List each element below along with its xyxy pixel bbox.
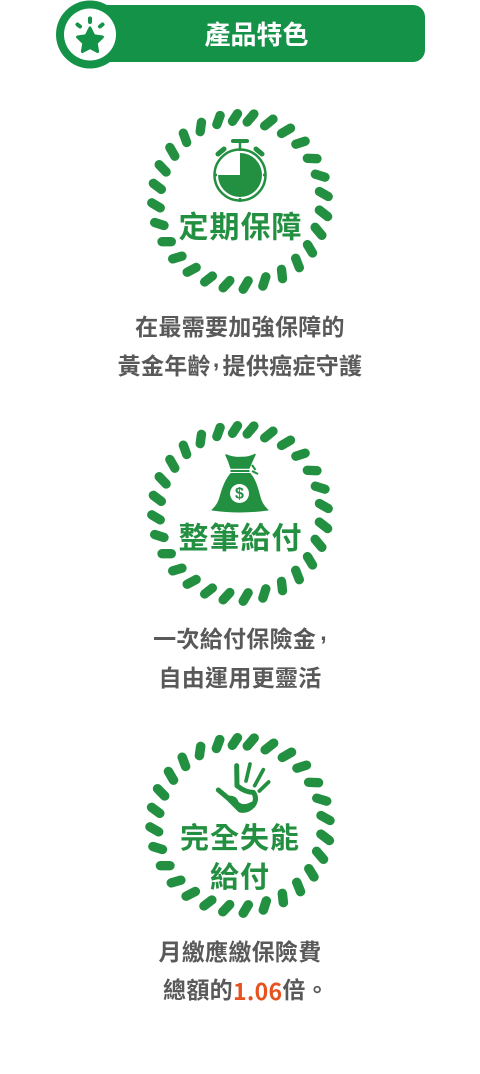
text block: term protection description (118, 314, 362, 379)
text block: lump-sum description: 自由運用更靈活 (158, 665, 322, 691)
text block: term protection description: 黃金年齡 (118, 353, 211, 379)
text block: term protection description: , (213, 346, 220, 372)
panel: lump-sum payment (152, 426, 328, 601)
text block: lump-sum description: 一次給付保險金 (153, 626, 316, 652)
ring title line 1: 完全失能 (180, 822, 300, 855)
dashed ring (150, 738, 330, 913)
ring title: 整筆給付 (178, 522, 302, 556)
header bar (95, 5, 425, 62)
panel: term protection (152, 114, 328, 289)
ring title line 2: 給付 (210, 861, 270, 894)
text block: lump-sum description: , (320, 619, 327, 645)
icon: star badge (56, 0, 124, 68)
text block: disability description (158, 939, 329, 1007)
text block: lump-sum description (153, 619, 327, 691)
dashed ring (152, 426, 328, 601)
icon: hand (218, 764, 269, 812)
panel: disability payment (150, 738, 330, 913)
ring title: 定期保障 (178, 212, 302, 244)
text block: disability description: 月繳應繳保險費 (158, 939, 322, 965)
text block: disability description: 總額的1.06倍。 (163, 973, 329, 1007)
text block: term protection description: 在最需要加強保障的 (135, 314, 345, 340)
text block: term protection description: 提供癌症守護 (223, 353, 362, 379)
header banner (56, 0, 425, 68)
dashed ring (152, 114, 328, 289)
icon: stopwatch (214, 141, 266, 202)
header title: 產品特色 (204, 20, 309, 50)
icon: money bag (212, 454, 268, 512)
icon: money bag: $ (235, 486, 244, 502)
